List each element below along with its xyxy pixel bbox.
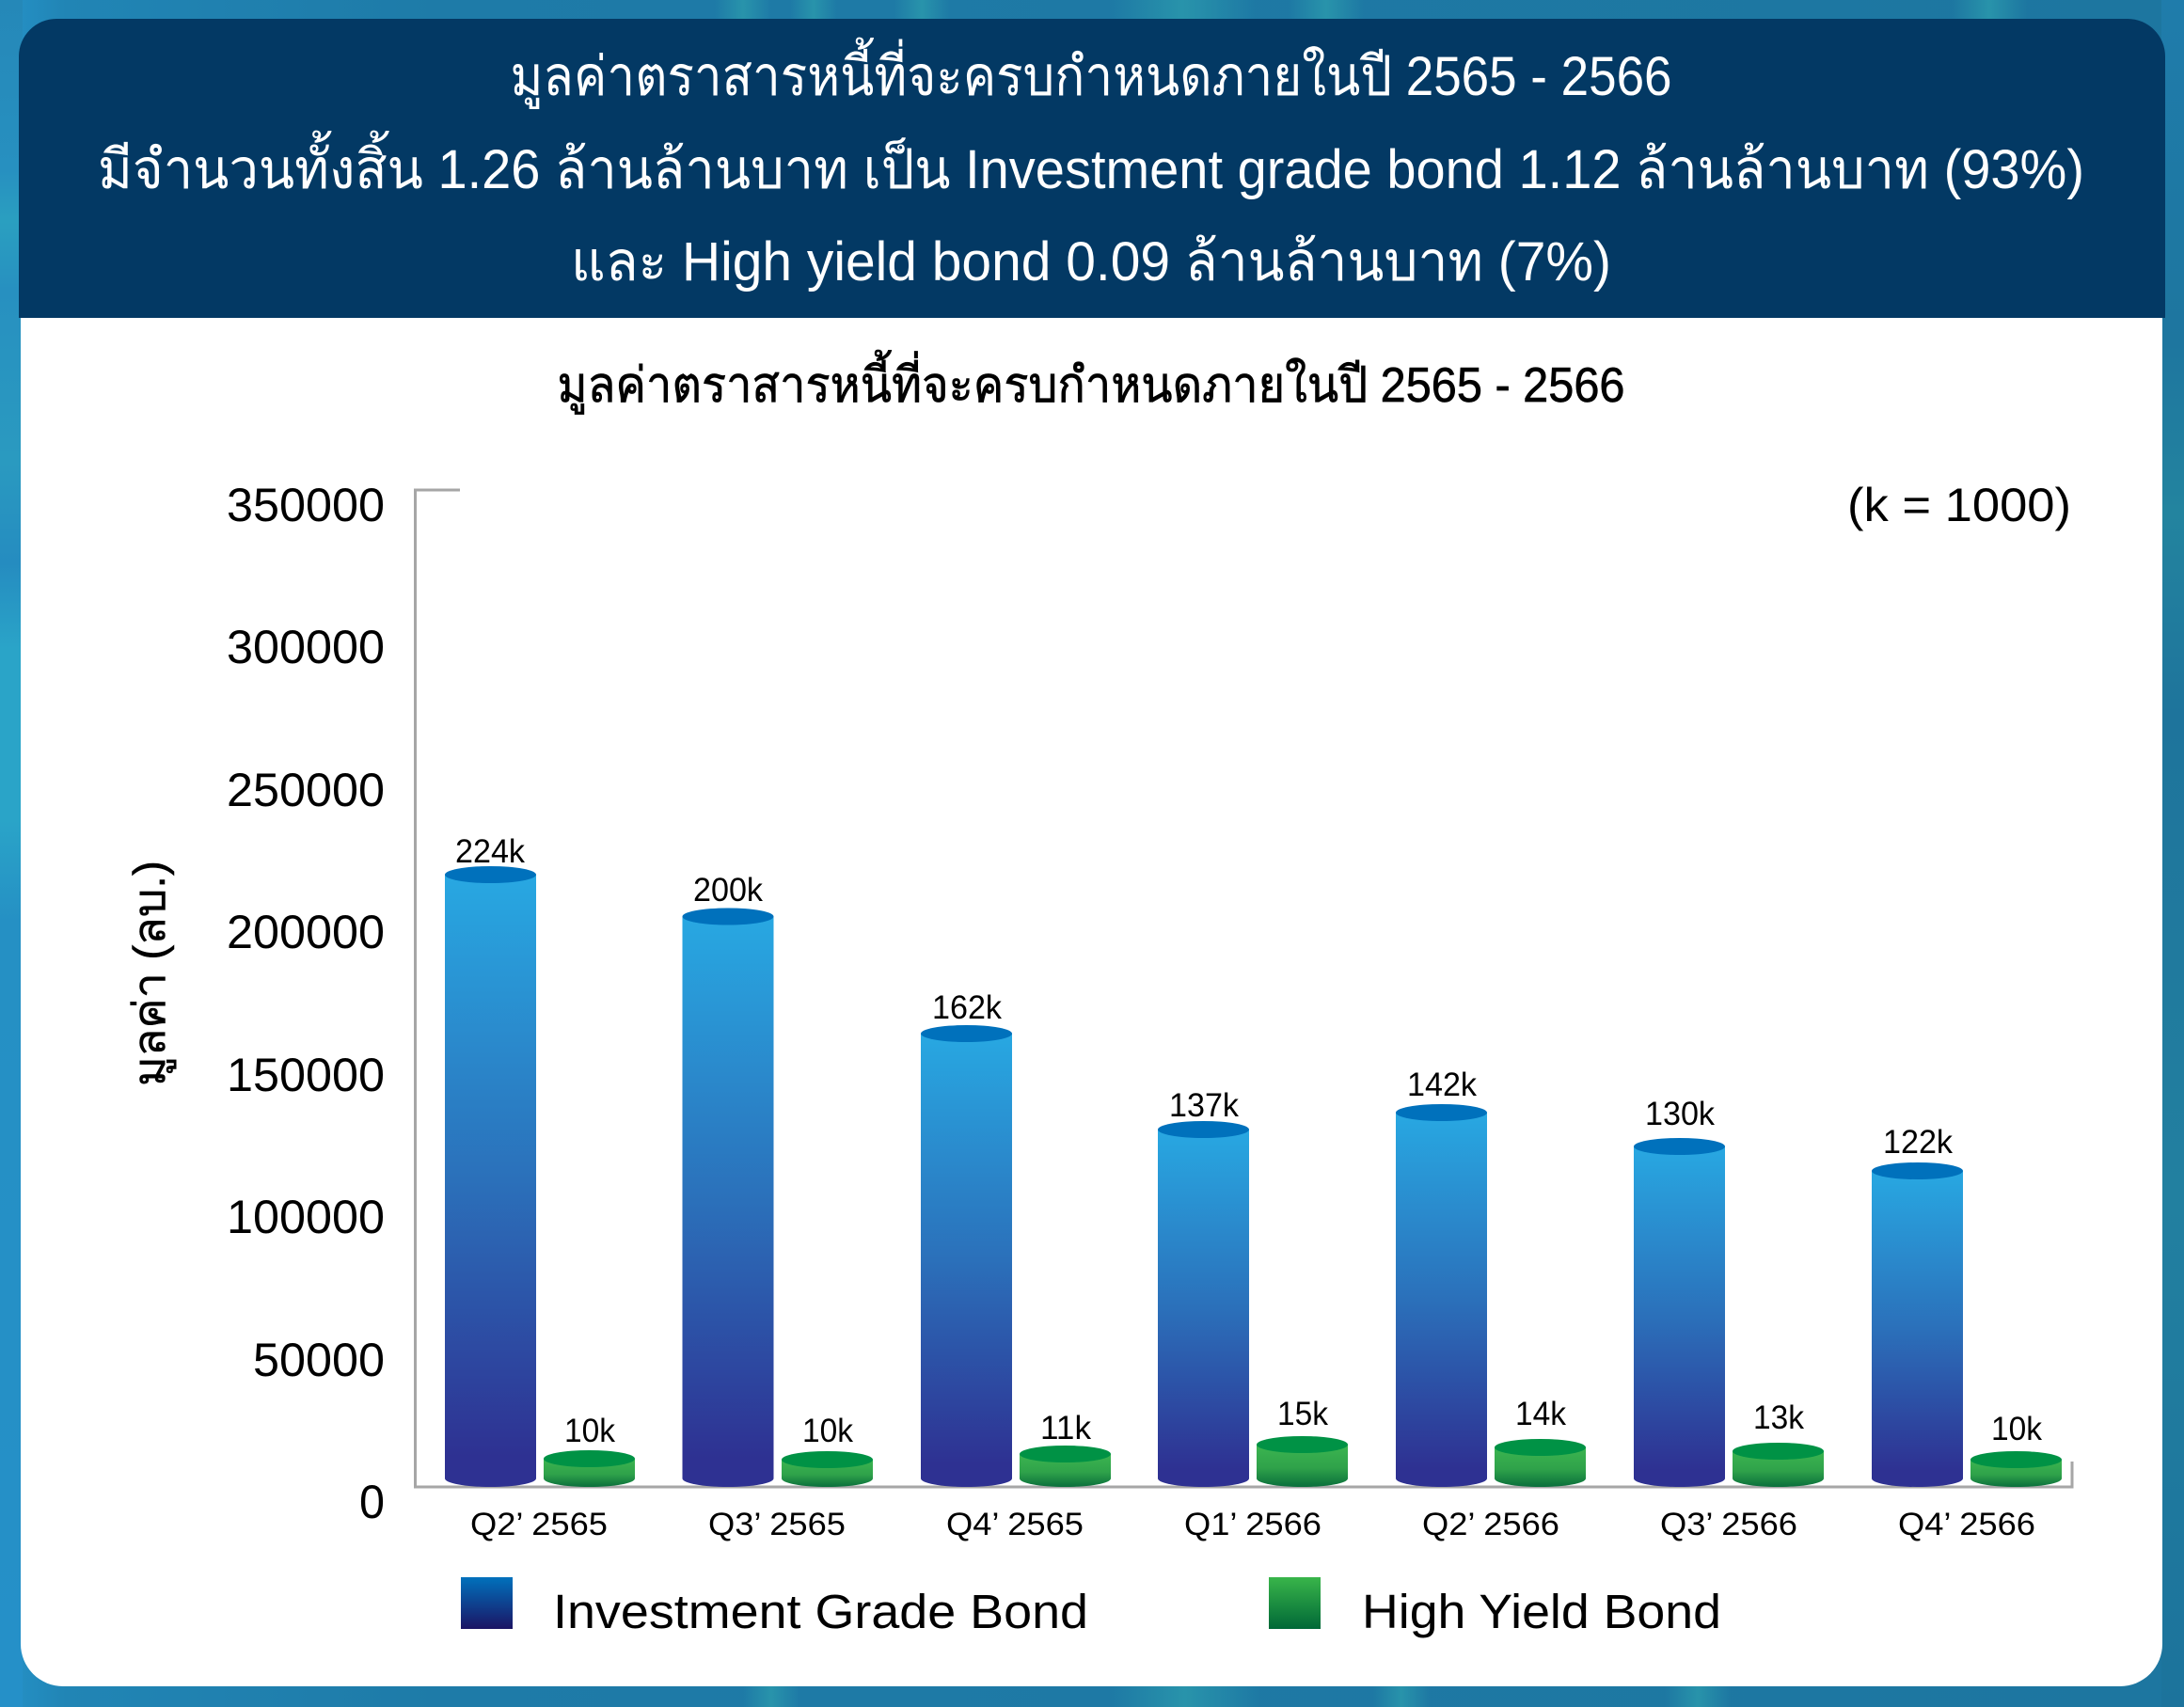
bars: Q3 2566 — [1634, 1138, 1824, 1487]
bars: Q4 2566 — [1872, 1162, 2062, 1487]
x axis labels: Q2’ 2565 — [470, 1507, 608, 1542]
data labels — [455, 833, 2042, 1449]
y axis tick labels: 50000 — [253, 1334, 385, 1386]
y axis tick labels: 300000 — [227, 621, 385, 673]
heading: banner text: มีจำนวนทั้งสิ้น 1.26 ล้านล้านบาท เป็น Investment grade bond 1.12 ล้านล้านบาท (93%) — [98, 131, 2084, 200]
data labels: 224k — [455, 833, 525, 870]
legend: High Yield Bond — [1269, 1577, 1721, 1638]
y axis tick labels: 250000 — [227, 764, 385, 816]
bars: Q2 2566 — [1396, 1104, 1586, 1487]
x axis labels: Q3’ 2566 — [1660, 1507, 1797, 1542]
data labels: 15k — [1277, 1396, 1328, 1432]
data labels: 11k — [1040, 1410, 1091, 1446]
data labels: 13k — [1753, 1399, 1804, 1436]
data labels: 200k — [693, 872, 763, 909]
panel: white chart card — [21, 301, 2162, 1686]
data labels: 10k — [564, 1413, 615, 1449]
y axis tick labels: 100000 — [227, 1191, 385, 1243]
chart: bond maturities by quarter — [124, 479, 2072, 1542]
axis lines — [416, 490, 2072, 1487]
heading: banner text — [98, 38, 2084, 292]
legend — [461, 1577, 1721, 1638]
bars: Q3 2565 — [683, 909, 873, 1487]
y axis tick labels — [227, 479, 385, 1528]
heading: banner text: และ High yield bond 0.09 ล้านล้านบาท (7%) — [571, 231, 1611, 292]
bars: Q1 2566 — [1158, 1121, 1348, 1487]
x axis labels: Q3’ 2565 — [708, 1507, 846, 1542]
x axis labels: Q4’ 2566 — [1898, 1507, 2035, 1542]
x axis labels: Q1’ 2566 — [1184, 1507, 1321, 1542]
y axis tick labels: 150000 — [227, 1049, 385, 1101]
data labels: 14k — [1515, 1396, 1566, 1432]
x axis labels — [470, 1507, 2035, 1542]
data labels: 122k — [1883, 1124, 1953, 1161]
y axis tick labels: 200000 — [227, 906, 385, 958]
data labels: 10k — [1991, 1411, 2042, 1447]
unit note: (k = 1000) — [1847, 479, 2071, 531]
chart title: มูลค่าตราสารหนี้ที่จะครบกำหนดภายในปี 2565 - 2566 — [557, 350, 1625, 415]
legend: High Yield Bond: High Yield Bond — [1362, 1585, 1721, 1638]
data labels: 137k — [1169, 1087, 1239, 1124]
data labels: 10k — [802, 1413, 853, 1449]
data labels: 130k — [1645, 1096, 1715, 1132]
bars: Q2 2565 — [445, 866, 635, 1487]
y axis tick labels: 0 — [359, 1476, 385, 1528]
bars: Q4 2565 — [921, 1025, 1111, 1487]
x axis labels: Q2’ 2566 — [1422, 1507, 1559, 1542]
legend: Investment Grade Bond: Investment Grade Bond — [553, 1585, 1088, 1638]
x axis labels: Q4’ 2565 — [946, 1507, 1084, 1542]
heading: banner text: มูลค่าตราสารหนี้ที่จะครบกำหนดภายในปี 2565 - 2566 — [510, 38, 1672, 109]
data labels: 142k — [1407, 1067, 1477, 1103]
data labels: 162k — [932, 989, 1002, 1026]
panel: header banner — [19, 19, 2165, 318]
y axis tick labels: 350000 — [227, 479, 385, 531]
y axis title: มูลค่า (ลบ.) — [124, 861, 177, 1086]
